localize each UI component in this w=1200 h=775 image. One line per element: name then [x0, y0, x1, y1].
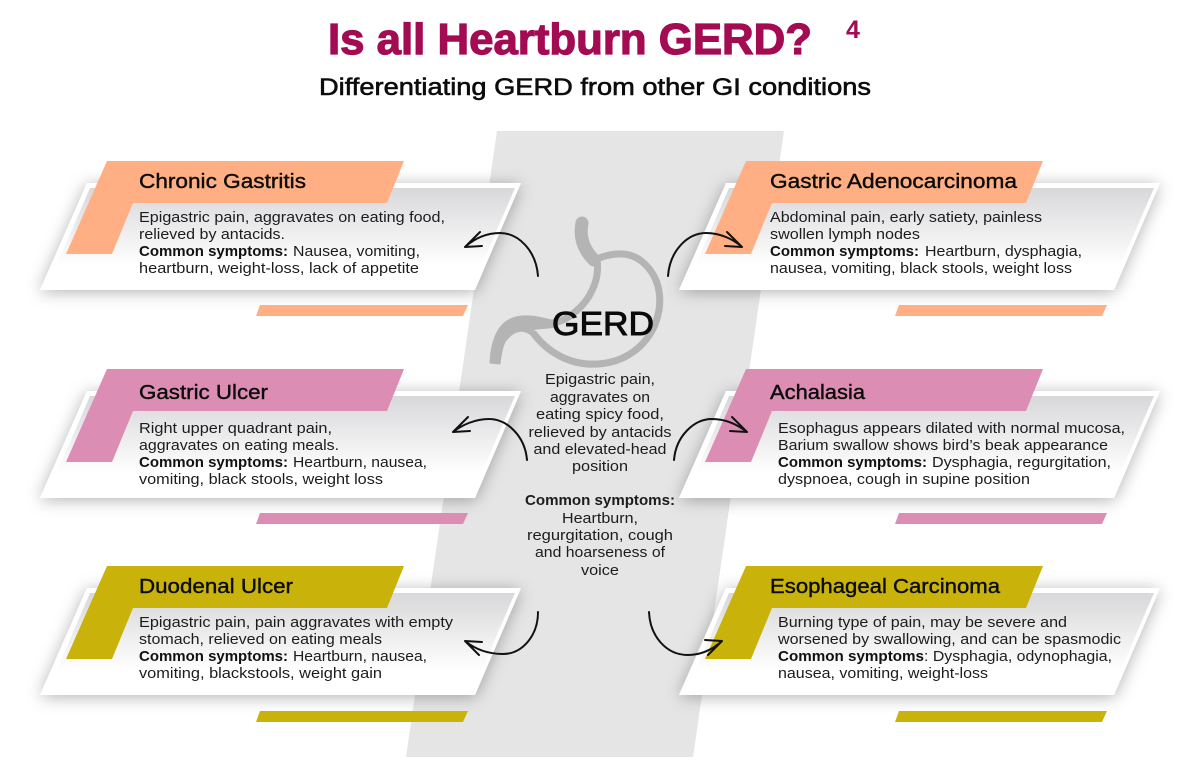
panel: Achalasia: dyspnoea, cough in supine position [778, 471, 1030, 488]
panel: Gastric Adenocarcinoma: nausea, vomiting, black stools, weight loss [770, 260, 1072, 277]
panel: Gastric Ulcer: aggravates on eating meals. [139, 437, 339, 454]
arrow: to Gastric Adenocarcinoma [668, 232, 742, 276]
GERD description [525, 371, 675, 579]
panel: Gastric Adenocarcinoma: Heartburn, dysphagia, [925, 243, 1082, 260]
panel: Duodenal Ulcer: stomach, relieved on eating meals [139, 631, 382, 648]
arrow: to Chronic Gastritis [465, 232, 538, 276]
arrow: to Esophageal Carcinoma [649, 612, 722, 655]
panel: Achalasia: Common symptoms: [778, 454, 927, 471]
title: Is all Heartburn GERD? [328, 15, 812, 64]
panel: Esophageal Carcinoma: Common symptoms [778, 648, 924, 665]
panel: Duodenal Ulcer: Epigastric pain, pain aggravates with empty [139, 614, 454, 631]
panel: Esophageal Carcinoma: worsened by swallowing, and can be spasmodic [777, 631, 1122, 648]
panel: Duodenal Ulcer [40, 566, 521, 722]
panel: Chronic Gastritis: Chronic Gastritis [139, 171, 306, 193]
panel: Esophageal Carcinoma: : Dysphagia, odynophagia, [924, 648, 1112, 665]
arrow: to Gastric Ulcer [453, 417, 527, 460]
GERD description: Common symptoms: [525, 492, 675, 509]
GERD description: regurgitation, cough [527, 527, 673, 544]
icon: stomach [490, 223, 660, 364]
panel: Esophageal Carcinoma: Burning type of pain, may be severe and [778, 614, 1067, 631]
panel: Chronic Gastritis: Nausea, vomiting, [293, 243, 420, 260]
panel: Achalasia: Esophagus appears dilated with normal mucosa, [778, 420, 1125, 437]
GERD description: eating spicy food, [536, 406, 664, 423]
panel: Gastric Adenocarcinoma: swollen lymph nodes [770, 226, 920, 243]
GERD description: position [572, 458, 628, 475]
arrow: to Achalasia [674, 417, 747, 460]
GERD description: Epigastric pain, [545, 371, 655, 388]
panel: Esophageal Carcinoma [679, 566, 1160, 722]
panel: Gastric Adenocarcinoma: Gastric Adenocarcinoma [770, 171, 1018, 193]
panel: Gastric Adenocarcinoma: Common symptoms: [770, 243, 919, 260]
panel: Achalasia: Dysphagia, regurgitation, [932, 454, 1111, 471]
panel: Achalasia [679, 369, 1160, 524]
panel: Gastric Ulcer [40, 369, 521, 524]
panel: Gastric Ulcer: Heartburn, nausea, [293, 454, 427, 471]
GERD description: and hoarseness of [535, 544, 666, 561]
panel: Esophageal Carcinoma: nausea, vomiting, weight-loss [778, 665, 988, 682]
panel: Chronic Gastritis: Common symptoms: [139, 243, 288, 260]
panel: Esophageal Carcinoma: Esophageal Carcinoma [770, 576, 1001, 598]
panel: Gastric Ulcer: vomiting, black stools, weight loss [139, 471, 383, 488]
panel: Duodenal Ulcer: Duodenal Ulcer [139, 576, 293, 598]
GERD description: voice [581, 562, 619, 579]
panel: Gastric Ulcer: Right upper quadrant pain, [139, 420, 332, 437]
panel: Gastric Ulcer: Gastric Ulcer [139, 382, 268, 404]
title: 4 [846, 16, 860, 44]
panel: Chronic Gastritis: Epigastric pain, aggravates on eating food, [139, 209, 445, 226]
panel: Duodenal Ulcer: Heartburn, nausea, [293, 648, 427, 665]
panel: Achalasia: Achalasia [770, 382, 866, 404]
panel: Duodenal Ulcer: vomiting, blackstools, weight gain [139, 665, 382, 682]
panel: Gastric Ulcer: Common symptoms: [139, 454, 288, 471]
panel: Chronic Gastritis [40, 161, 521, 316]
panel: Gastric Adenocarcinoma [679, 161, 1160, 316]
GERD description: relieved by antacids [528, 424, 672, 441]
GERD label: GERD [552, 305, 654, 342]
arrow: to Duodenal Ulcer [465, 612, 538, 655]
subtitle: Differentiating GERD from other GI conditions [319, 74, 871, 101]
GERD description: Heartburn, [562, 510, 638, 527]
panel: Achalasia: Barium swallow shows bird’s beak appearance [778, 437, 1108, 454]
GERD description: aggravates on [550, 389, 650, 406]
panel: Chronic Gastritis: heartburn, weight-loss, lack of appetite [139, 260, 419, 277]
panel: Duodenal Ulcer: Common symptoms: [139, 648, 288, 665]
central grey band [406, 131, 784, 757]
panel: Chronic Gastritis: relieved by antacids. [139, 226, 285, 243]
panel: Gastric Adenocarcinoma: Abdominal pain, early satiety, painless [770, 209, 1042, 226]
GERD description: and elevated-head [534, 441, 666, 458]
